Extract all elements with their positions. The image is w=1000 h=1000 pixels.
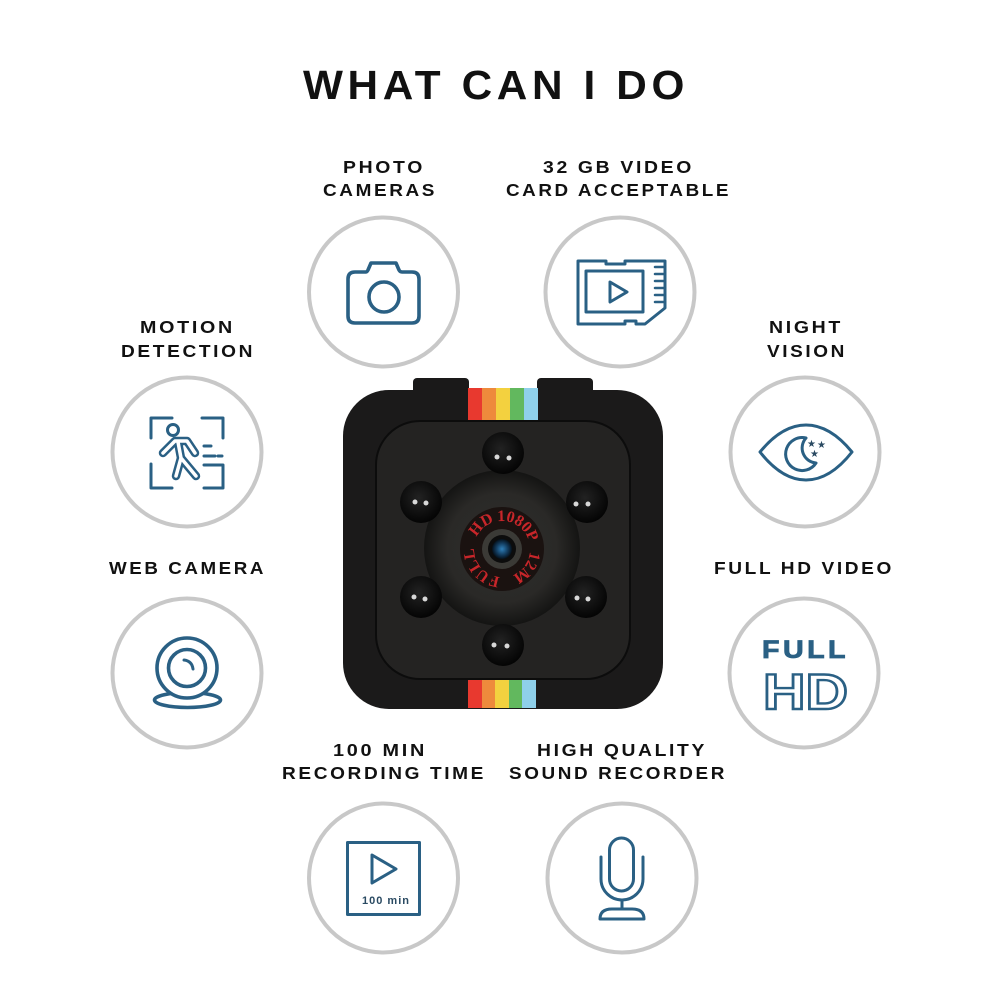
top rainbow stripe [468, 388, 538, 420]
label: full hd video: FULL HD VIDEO [714, 558, 894, 578]
panel: 100 min recording time [309, 804, 458, 952]
label: high quality sound recorder: HIGH QUALITY [537, 740, 707, 760]
icon: eye with moon: ★ [807, 439, 816, 450]
red lens ring [460, 507, 544, 591]
red lens ring: 12M [513, 552, 540, 584]
label: web camera: WEB CAMERA [109, 558, 266, 578]
icon: microphone [600, 838, 644, 919]
panel: night vision [730, 378, 880, 526]
icon: sd card [578, 261, 665, 324]
clips on top [413, 378, 593, 398]
label: 32 gb video card: 32 GB VIDEO [543, 157, 694, 177]
icon: camera [348, 263, 419, 323]
label: 100 min recording time [282, 740, 486, 783]
panel: motion detection [112, 378, 262, 526]
product photo: mini camera [343, 378, 663, 709]
label: night vision: VISION [767, 341, 847, 361]
label: photo cameras: CAMERAS [323, 180, 437, 200]
lens dome [424, 470, 580, 626]
label: motion detection [121, 317, 255, 361]
icon: eye with moon: ★ [817, 440, 826, 451]
bottom rainbow stripe [468, 678, 536, 708]
title: WHAT CAN I DO [303, 62, 689, 108]
icon: full hd [762, 636, 849, 720]
label: high quality sound recorder: SOUND RECORDER [509, 763, 727, 783]
camera body [343, 390, 663, 709]
label: 100 min recording time: RECORDING TIME [282, 763, 486, 783]
icon: webcam [154, 638, 220, 708]
icon: eye with moon [760, 425, 852, 480]
infrared leds [400, 432, 608, 666]
icon: play box [348, 842, 420, 914]
label: night vision [767, 317, 847, 361]
label: 100 min recording time: 100 MIN [333, 740, 427, 760]
label: 32 gb video card: CARD ACCEPTABLE [506, 180, 731, 200]
label: photo cameras: PHOTO [343, 157, 425, 177]
icon: eye with moon: ★ [810, 449, 819, 460]
label: 32 gb video card [506, 157, 731, 200]
red lens ring: FULL [464, 549, 500, 588]
label: motion detection: MOTION [140, 317, 235, 337]
label: photo cameras [323, 157, 437, 200]
panel: video card [546, 218, 694, 366]
icon: walking person in frame [151, 418, 223, 488]
panel: sound recorder [548, 804, 696, 952]
inner lens plate [376, 421, 630, 679]
label: night vision: NIGHT [769, 317, 843, 337]
panel: photo cameras [309, 218, 458, 366]
red lens ring: 1080P [498, 510, 538, 539]
icon: full hd: FULL [762, 636, 849, 664]
lens [482, 529, 522, 569]
panel: full hd video [730, 598, 878, 748]
red lens ring: HD [468, 514, 492, 537]
label: high quality sound recorder [509, 740, 727, 783]
label: motion detection: DETECTION [121, 341, 255, 361]
icon: full hd: HD [763, 664, 848, 720]
icon: play box: 100 min [362, 895, 409, 907]
panel: web camera [112, 598, 262, 748]
